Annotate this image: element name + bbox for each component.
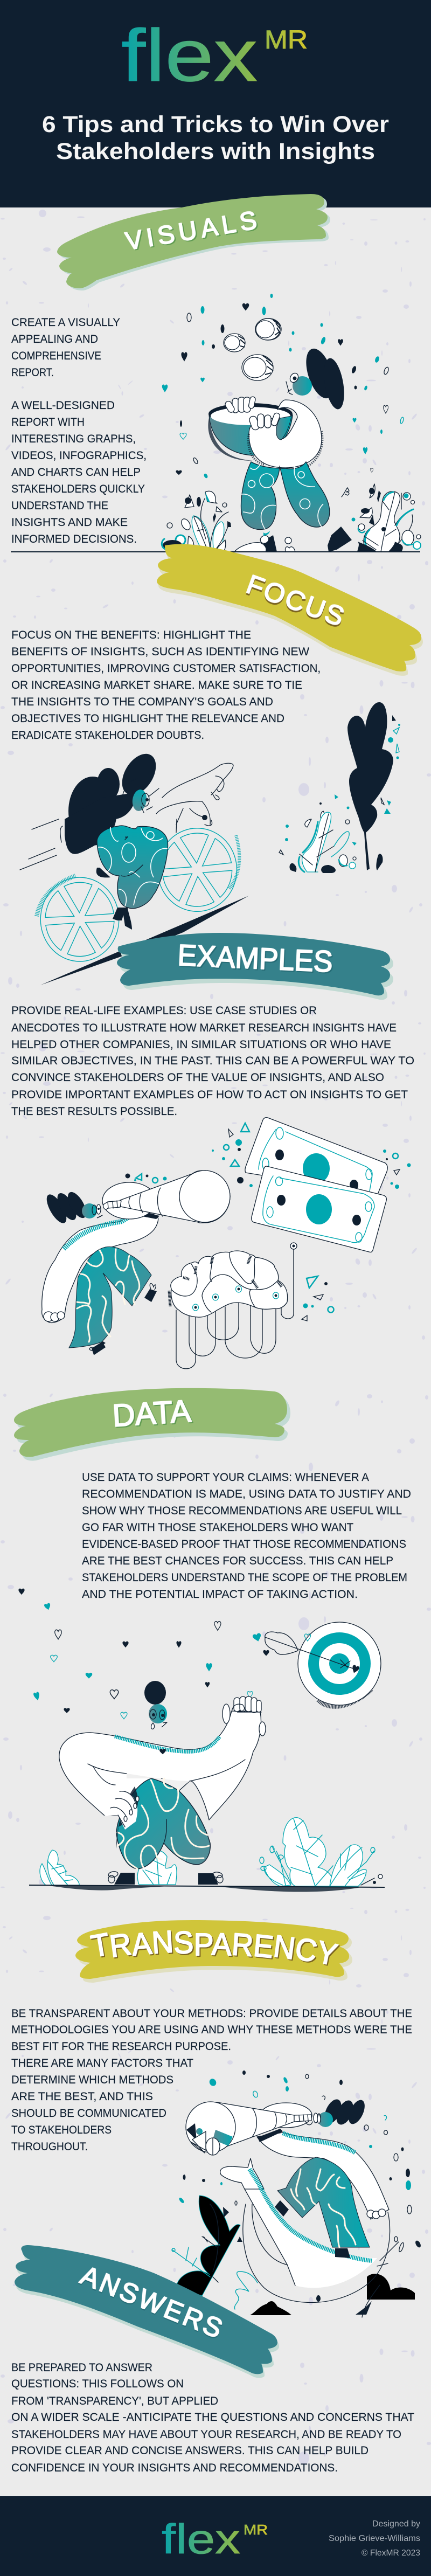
arrow <box>265 1632 360 1674</box>
footer logo <box>162 2515 268 2563</box>
upper arm <box>257 2132 389 2219</box>
text: focus tip <box>11 629 321 742</box>
text: focus tip: OPPORTUNITIES, IMPROVING CUSTOMER SATISFACTION, <box>11 662 321 675</box>
text: examples tip: THE BEST RESULTS POSSIBLE. <box>11 1105 177 1118</box>
small decorative plant <box>279 811 357 873</box>
dark drops and hearts <box>176 303 357 475</box>
illustration: person riding a bicycle uphill <box>20 748 250 985</box>
lower arm <box>245 2188 377 2288</box>
text: transparency tip: THROUGHOUT. <box>11 2141 88 2153</box>
hair and head <box>286 345 347 411</box>
credits: Sophie Grieve-Williams <box>329 2534 420 2543</box>
illustration: black plants <box>172 2196 415 2317</box>
illustration: brain with wires <box>169 1243 334 1369</box>
logo: flexMR <box>121 15 308 97</box>
wheels <box>27 814 250 976</box>
text: data tip: SHOW WHY THOSE RECOMMENDATIONS ARE USEFUL WILL <box>82 1505 402 1517</box>
text: transparency tip: DETERMINE WHICH METHODS <box>11 2074 173 2086</box>
note: front <box>252 1166 386 1252</box>
illustration: banknotes <box>125 1118 411 1252</box>
text: visuals tip: INTERESTING GRAPHS, <box>11 433 136 445</box>
text: examples tip: HELPED OTHER COMPANIES, IN SIMILAR SITUATIONS OR WHO HAVE <box>11 1038 391 1051</box>
text: data tip: STAKEHOLDERS UNDERSTAND THE SCOPE OF THE PROBLEM <box>82 1571 407 1584</box>
credits: © FlexMR 2023 <box>362 2549 420 2558</box>
illustration: person with megaphone and magnifier <box>178 2071 422 2302</box>
coins <box>224 318 281 380</box>
header panel <box>0 0 431 207</box>
text: examples tip: ANECDOTES TO ILLUSTRATE HOW MARKET RESEARCH INSIGHTS HAVE <box>11 1022 397 1034</box>
illustration: person sitting with raised arm <box>29 1681 385 1892</box>
banner: data: DATA <box>112 1394 192 1434</box>
illustration: person with megaphone <box>42 1171 230 1355</box>
text: examples tip: PROVIDE IMPORTANT EXAMPLES OF HOW TO ACT ON INSIGHTS TO GET <box>11 1089 408 1101</box>
credits <box>329 2519 420 2558</box>
plants: ground and dark blocks <box>234 527 352 552</box>
megaphone <box>186 2102 321 2155</box>
arm and pointing hand <box>156 763 233 833</box>
megaphone <box>102 1171 230 1223</box>
text: transparency tip: THERE ARE MANY FACTORS THAT <box>11 2057 193 2069</box>
text: visuals tip: COMPREHENSIVE <box>11 350 101 362</box>
text: data tip: EVIDENCE-BASED PROOF THAT THOSE RECOMMENDATIONS <box>82 1538 406 1550</box>
clasped hands <box>223 1696 266 1736</box>
plants: left <box>162 491 231 552</box>
feet <box>113 908 132 930</box>
dress <box>69 1247 151 1348</box>
text: visuals tip: REPORT. <box>11 366 54 379</box>
illustration: dark leaf plant <box>279 702 400 873</box>
text: data tip: USE DATA TO SUPPORT YOUR CLAIMS: WHENEVER A <box>82 1471 369 1484</box>
text: answers tip: BE PREPARED TO ANSWER <box>11 2362 152 2374</box>
gripping fingers <box>104 1789 137 1830</box>
text: transparency tip: METHODOLOGIES YOU ARE USING AND WHY THESE METHODS WERE THE <box>11 2024 412 2036</box>
text: transparency tip: SHOULD BE COMMUNICATED <box>11 2107 166 2120</box>
slope <box>40 896 249 985</box>
arm and torso <box>59 1711 261 1820</box>
outlined drops and hearts <box>180 313 404 497</box>
body <box>96 826 168 930</box>
text: visuals tip: VIDEOS, INFOGRAPHICS, <box>11 449 147 462</box>
footer panel <box>0 2496 431 2576</box>
text: answers tip: FROM 'TRANSPARENCY', BUT APPLIED <box>11 2395 218 2407</box>
arm and body <box>42 1212 158 1322</box>
banner: visuals: VISUALS <box>123 205 259 255</box>
logo: flexMR: flex <box>121 15 258 97</box>
text: transparency tip: ARE THE BEST, AND THIS <box>11 2090 153 2103</box>
banner: visuals <box>57 194 330 290</box>
title <box>42 112 389 164</box>
text: answers tip: ON A WIDER SCALE -ANTICIPATE THE QUESTIONS AND CONCERNS THAT <box>11 2411 414 2423</box>
text: transparency tip: TO STAKEHOLDERS <box>11 2124 112 2136</box>
illustration: target with arrow <box>265 1622 381 1707</box>
text: focus tip: ERADICATE STAKEHOLDER DOUBTS. <box>11 729 204 742</box>
text: visuals tip <box>11 316 147 545</box>
banner: examples: EXAMPLES <box>177 938 333 979</box>
text: visuals tip: UNDERSTAND THE <box>11 500 108 512</box>
ground <box>29 1885 385 1892</box>
text: visuals tip: INFORMED DECISIONS. <box>11 533 137 545</box>
confetti <box>125 1123 411 1189</box>
plants on ground <box>40 1818 383 1886</box>
shoes <box>89 1284 157 1355</box>
text: examples tip: SIMILAR OBJECTIVES, IN THE PAST. THIS CAN BE A POWERFUL WAY TO <box>11 1055 414 1067</box>
banner: answers <box>15 2245 279 2378</box>
text: visuals tip: APPEALING AND <box>11 333 98 345</box>
text: answers tip <box>11 2362 414 2474</box>
text: data tip: ARE THE BEST CHANCES FOR SUCCESS. THIS CAN HELP <box>82 1555 393 1567</box>
text: visuals tip: CREATE A VISUALLY <box>11 316 120 329</box>
divider rule <box>11 551 420 552</box>
banner: transparency: TRANSPARENCY <box>88 1924 340 1972</box>
title: Stakeholders with Insights <box>56 139 375 164</box>
text: visuals tip: INSIGHTS AND MAKE <box>11 516 128 529</box>
text: focus tip: OR INCREASING MARKET SHARE. MAKE SURE TO TIE <box>11 679 302 691</box>
text: data tip <box>82 1471 411 1601</box>
text: examples tip: PROVIDE REAL-LIFE EXAMPLES: USE CASE STUDIES OR <box>11 1005 317 1017</box>
text: answers tip: PROVIDE CLEAR AND CONCISE ANSWERS. THIS CAN HELP BUILD <box>11 2445 369 2457</box>
title: 6 Tips and Tricks to Win Over <box>42 112 389 137</box>
banner: examples <box>117 933 393 1000</box>
banner: focus: FOCUS <box>242 569 348 632</box>
illustration: person catching coins in a bowl <box>162 294 421 552</box>
text: answers tip: CONFIDENCE IN YOUR INSIGHTS AND RECOMMENDATIONS. <box>11 2462 338 2474</box>
bowl <box>208 403 293 461</box>
text: answers tip: QUESTIONS: THIS FOLLOWS ON <box>11 2378 184 2390</box>
credits: Designed by <box>372 2519 420 2529</box>
text: examples tip <box>11 1005 414 1118</box>
face <box>314 2112 333 2127</box>
hair <box>65 748 163 854</box>
text: focus tip: BENEFITS OF INSIGHTS, SUCH AS IDENTIFYING NEW <box>11 646 309 658</box>
text: focus tip: OBJECTIVES TO HIGHLIGHT THE RELEVANCE AND <box>11 712 284 725</box>
text: data tip: AND THE POTENTIAL IMPACT OF TAKING ACTION. <box>82 1588 358 1601</box>
text: examples tip: CONVINCE STAKEHOLDERS OF THE VALUE OF INSIGHTS, AND ALSO <box>11 1071 384 1084</box>
text: transparency tip: BE TRANSPARENT ABOUT YOUR METHODS: PROVIDE DETAILS ABOUT THE <box>11 2007 412 2020</box>
text: visuals tip: A WELL-DESIGNED <box>11 399 115 412</box>
lens circle <box>243 2204 390 2302</box>
shoes <box>114 1873 218 1885</box>
legs <box>241 462 330 530</box>
face <box>82 1203 102 1218</box>
confetti <box>178 2071 422 2302</box>
logo: flexMR: MR <box>265 26 308 54</box>
note: back <box>245 1118 387 1194</box>
text: answers tip: STAKEHOLDERS MAY HAVE ABOUT YOUR RESEARCH, AND BE READY TO <box>11 2428 401 2441</box>
text: data tip: GO FAR WITH THOSE STAKEHOLDERS WHO WANT <box>82 1521 353 1534</box>
dress <box>277 2157 370 2247</box>
shoes and fist <box>275 2200 386 2258</box>
illustration: hearts <box>18 1589 311 1759</box>
text: transparency tip <box>11 2007 412 2153</box>
text: transparency tip: BEST FIT FOR THE RESEARCH PURPOSE. <box>11 2040 231 2053</box>
hands <box>224 396 281 431</box>
plants: right <box>357 484 421 552</box>
text: visuals tip: STAKEHOLDERS QUICKLY <box>11 483 145 495</box>
arm wrapped around bowl <box>248 400 322 469</box>
text: focus tip: THE INSIGHTS TO THE COMPANY'S GOALS AND <box>11 696 273 708</box>
hair <box>43 1189 90 1226</box>
footer logo: flex <box>162 2515 240 2563</box>
text: visuals tip: AND CHARTS CAN HELP <box>11 466 141 479</box>
legs <box>104 1778 210 1869</box>
text: focus tip: FOCUS ON THE BENEFITS: HIGHLIGHT THE <box>11 629 251 641</box>
banner: answers: ANSWERS <box>77 2260 227 2344</box>
face <box>131 788 159 813</box>
banner: data <box>14 1388 290 1461</box>
text: visuals tip: REPORT WITH <box>11 416 85 428</box>
fist <box>44 1312 65 1321</box>
hair <box>321 2097 368 2127</box>
shapes in megaphone <box>186 2123 233 2155</box>
head <box>144 1681 167 1729</box>
speed lines <box>20 778 137 870</box>
text: data tip: RECOMMENDATION IS MADE, USING DATA TO JUSTIFY AND <box>82 1488 411 1500</box>
footer logo: MR <box>244 2522 268 2538</box>
banner: focus <box>157 544 423 676</box>
teal drops and hearts <box>162 294 383 522</box>
